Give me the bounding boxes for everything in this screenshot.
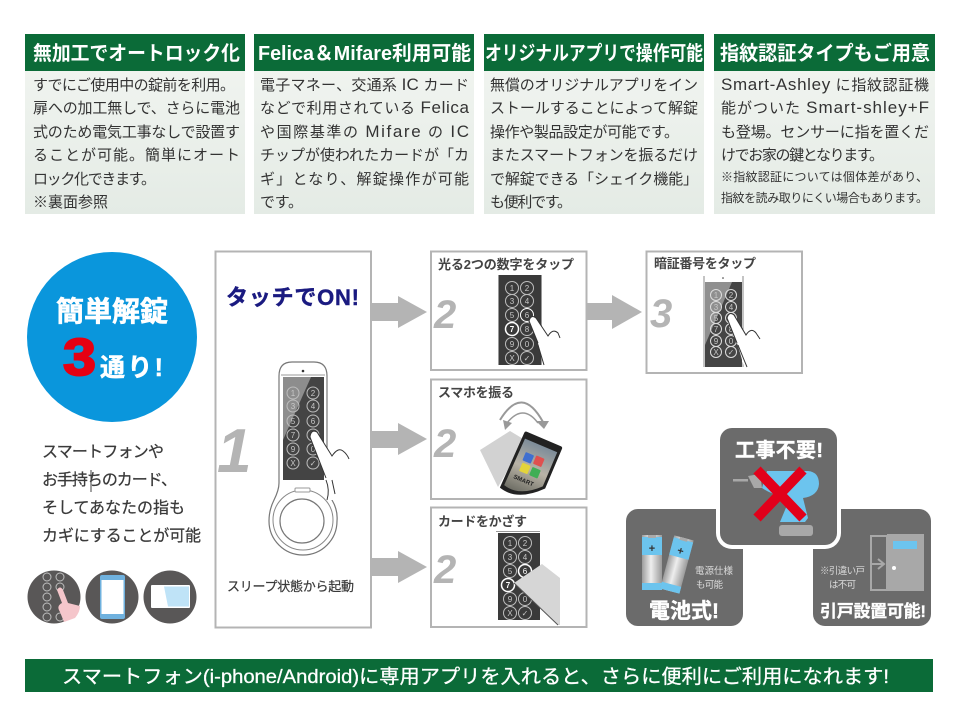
text: original app: またスマートフォンを振るだけ bbox=[490, 147, 698, 164]
step number 2: 2 bbox=[433, 422, 456, 466]
illustration: keypad with finger: 6 bbox=[525, 311, 530, 320]
illustration: lock with keypad: 3 bbox=[291, 402, 296, 411]
illustration: keypad and card: 5 bbox=[508, 567, 513, 576]
heading: tap lit numbers: 光る2つの数字をタップ bbox=[438, 257, 574, 272]
illustration: lock with keypad: 2 bbox=[311, 389, 316, 398]
text: original app: も便利です。 bbox=[490, 194, 572, 211]
note: mains power option bbox=[695, 565, 733, 591]
text: no-modification auto lock: ることが可能。簡単にオート bbox=[33, 146, 240, 164]
illustration: lock with keypad: 6 bbox=[311, 417, 316, 426]
text: Felica and Mifare bbox=[260, 75, 470, 211]
text: original app: ストールすることによって解錠 bbox=[490, 100, 698, 117]
illustration: keypad with finger: X bbox=[713, 348, 719, 357]
illustration: keypad with finger: X bbox=[509, 354, 515, 363]
text: fingerprint type: 指紋を読み取りにくい場合もあります。 bbox=[721, 190, 928, 205]
icon: batteries bbox=[642, 535, 694, 594]
text: Felica and Mifare: 電子マネー、交通系 IC カード bbox=[260, 75, 469, 94]
illustration: keypad and card: 3 bbox=[508, 553, 513, 562]
heading: no-modification auto lock: 無加工でオートロック化 bbox=[33, 42, 240, 65]
icon: card bbox=[144, 570, 196, 624]
panel: step 2 shake the smartphone bbox=[431, 380, 586, 505]
illustration: keypad and card bbox=[496, 532, 560, 625]
icon: batteries: + bbox=[649, 543, 655, 555]
text: Felica and Mifare: チップが使われたカードが「カ bbox=[260, 147, 469, 164]
illustration: keypad with finger: 3 bbox=[510, 297, 515, 306]
illustration: keypad and card: 9 bbox=[508, 595, 513, 604]
heading: original app: オリジナルアプリで操作可能 bbox=[485, 42, 703, 65]
illustration: keypad with finger: 9 bbox=[510, 340, 515, 349]
heading: touch on: タッチでON! bbox=[226, 285, 359, 310]
panel: fingerprint type bbox=[714, 34, 935, 214]
text: Felica and Mifare: や国際基準の Mifare の IC bbox=[260, 122, 469, 141]
icon: batteries: + bbox=[676, 545, 685, 558]
text: fingerprint type bbox=[721, 75, 929, 205]
text: no-modification auto lock: 扉への加工無しで、さらに電池 bbox=[33, 100, 240, 117]
icon: drill crossed out bbox=[733, 470, 819, 536]
illustration: keypad with finger: 5 bbox=[714, 314, 719, 323]
text: fingerprint type: 能がついた Smart-shley+F bbox=[721, 98, 929, 117]
illustration: keypad and card: 1 bbox=[508, 539, 513, 548]
text: no-modification auto lock: 式のため電気工事なしで設置す bbox=[33, 124, 240, 141]
badge: three ways to unlock: 簡単解錠 bbox=[56, 296, 168, 327]
panel: step 2 tap two lit numbers bbox=[431, 252, 586, 370]
illustration: lock with keypad: 5 bbox=[291, 417, 296, 426]
illustration: keypad with finger: 4 bbox=[729, 303, 734, 312]
step number 2: 2 bbox=[433, 548, 456, 592]
illustration: keypad with finger: 8 bbox=[525, 325, 530, 334]
illustration: keypad with finger: 1 bbox=[714, 291, 719, 300]
icon: door bbox=[871, 534, 924, 591]
illustration: keypad with finger: 7 bbox=[510, 325, 515, 334]
text: smartphone, card and finger can be the key: スマートフォンや bbox=[42, 443, 164, 461]
illustration: lock with keypad: 9 bbox=[291, 445, 296, 454]
illustration: keypad and card: ✓ bbox=[522, 609, 528, 618]
illustration: keypad and card: 4 bbox=[523, 553, 528, 562]
card: no construction needed bbox=[716, 424, 841, 549]
step number 3: 3 bbox=[650, 292, 672, 336]
text: fingerprint type: けでお家の鍵となります。 bbox=[721, 147, 884, 164]
text: smartphone, card and finger can be the key bbox=[42, 443, 201, 545]
illustration: lock with keypad: 4 bbox=[311, 402, 316, 411]
text: fingerprint type: Smart-Ashley に指紋認証機 bbox=[721, 75, 929, 94]
arrow: step 1 to tap bbox=[371, 296, 427, 328]
icon: smartphone bbox=[86, 570, 138, 624]
badge: three ways to unlock: 通り! bbox=[100, 354, 163, 382]
illustration: keypad with finger: 0 bbox=[525, 340, 530, 349]
illustration: keypad and card: 6 bbox=[523, 567, 528, 576]
illustration: keypad with finger: 4 bbox=[525, 297, 530, 306]
heading: fingerprint type: 指紋認証タイプもご用意 bbox=[720, 41, 930, 65]
label: battery powered: 電池式! bbox=[649, 600, 719, 623]
illustration: lock with keypad: 0 bbox=[311, 445, 316, 454]
heading: Felica and Mifare: Felica＆Mifare利用可能 bbox=[258, 42, 471, 65]
text: original app: で解錠できる「シェイク機能」 bbox=[490, 171, 698, 188]
illustration: keypad with finger: 0 bbox=[729, 337, 734, 346]
text: no-modification auto lock: ※裏面参照 bbox=[33, 194, 108, 211]
illustration: lock with keypad bbox=[269, 362, 350, 555]
illustration: lock with keypad: 7 bbox=[291, 431, 296, 440]
text: smartphone, card and finger can be the key: そしてあなたの指も bbox=[42, 499, 185, 517]
badge: three ways to unlock: 3 bbox=[63, 329, 96, 387]
illustration: lock with keypad: 8 bbox=[311, 431, 316, 440]
illustration: lock with keypad: X bbox=[290, 459, 296, 468]
banner: app message bbox=[25, 659, 933, 692]
panel: original app bbox=[484, 34, 704, 214]
illustration: keypad with finger: 2 bbox=[525, 284, 530, 293]
illustration: keypad with finger bbox=[704, 276, 761, 367]
card: sliding door bbox=[813, 509, 931, 626]
text: original app: 無償のオリジナルアプリをイン bbox=[490, 77, 698, 94]
text: original app: 操作や製品設定が可能です。 bbox=[490, 124, 679, 141]
text: no-modification auto lock: ロック化できます。 bbox=[33, 171, 156, 188]
badge: three ways to unlock bbox=[27, 252, 197, 422]
illustration: keypad with finger bbox=[498, 275, 560, 365]
heading: hold card: カードをかざす bbox=[438, 514, 527, 529]
illustration: keypad and card: 2 bbox=[523, 539, 528, 548]
text: Felica and Mifare: ギ」となり、解錠操作が可能 bbox=[260, 171, 469, 188]
illustration: keypad with finger: ✓ bbox=[728, 348, 734, 357]
illustration: keypad with finger: 9 bbox=[714, 337, 719, 346]
illustration: keypad and card: 7 bbox=[506, 581, 511, 590]
note: not for double sliding: は不可 bbox=[829, 580, 856, 591]
note: mains power option: も可能 bbox=[696, 579, 723, 591]
text: Felica and Mifare: です。 bbox=[260, 194, 303, 211]
illustration: keypad with finger: 8 bbox=[729, 325, 734, 334]
text: fingerprint type: も登場。センサーに指を置くだ bbox=[721, 124, 929, 141]
panel: Felica and Mifare bbox=[254, 34, 474, 214]
step number 1: 1 bbox=[217, 417, 251, 486]
heading: shake smartphone: スマホを振る bbox=[438, 385, 514, 400]
illustration: keypad with finger: 3 bbox=[714, 303, 719, 312]
icon: keypad with finger bbox=[28, 570, 80, 624]
icon: shake arcs bbox=[500, 402, 549, 430]
illustration: keypad with finger: 2 bbox=[729, 291, 734, 300]
note: mains power option: 電源仕様 bbox=[695, 565, 733, 577]
text: no-modification auto lock bbox=[33, 77, 240, 211]
illustration: lock with keypad: ✓ bbox=[310, 459, 316, 468]
panel: step 3 tap passcode bbox=[646, 252, 802, 373]
illustration: keypad with finger: ✓ bbox=[524, 354, 530, 363]
panel: no-modification auto lock bbox=[25, 34, 245, 214]
panel: step 2 hold card bbox=[431, 508, 586, 627]
text: no-modification auto lock: すでにご使用中の錠前を利用。 bbox=[33, 77, 235, 94]
illustration: keypad and card: X bbox=[507, 609, 513, 618]
illustration: smartphone bbox=[499, 431, 563, 505]
arrow: step 1 to card bbox=[371, 551, 427, 583]
illustration: lock with keypad: 1 bbox=[291, 389, 296, 398]
text: smartphone, card and finger can be the key: お手持ちのカード、 bbox=[42, 471, 177, 489]
label: no construction: 工事不要! bbox=[735, 439, 823, 462]
caption: wake from sleep: スリープ状態から起動 bbox=[227, 579, 354, 594]
illustration: keypad with finger: 6 bbox=[729, 314, 734, 323]
illustration: smartphone: SMART bbox=[512, 474, 534, 488]
illustration: keypad with finger: 7 bbox=[714, 325, 719, 334]
text: smartphone, card and finger can be the key: カギにすることが可能 bbox=[42, 527, 201, 545]
text: Felica and Mifare: などで利用されている Felica bbox=[260, 98, 470, 117]
arrow: step 1 to shake bbox=[371, 423, 427, 455]
label: sliding door: 引戸設置可能! bbox=[820, 601, 926, 621]
note: not for double sliding bbox=[820, 565, 865, 591]
illustration: keypad with finger: 1 bbox=[510, 284, 515, 293]
arrow: step 2 to step 3 bbox=[586, 295, 642, 329]
text: original app bbox=[490, 77, 698, 211]
panel: step 1 touch on bbox=[216, 252, 371, 628]
step number 2: 2 bbox=[433, 293, 456, 337]
card: battery powered bbox=[626, 509, 743, 626]
heading: tap passcode: 暗証番号をタップ bbox=[654, 256, 756, 271]
banner: app message: スマートフォン(i-phone/Android)に専用アプリを入れると、さらに便利にご利用になれます! bbox=[62, 666, 889, 688]
illustration: keypad with finger: 5 bbox=[510, 311, 515, 320]
note: not for double sliding: ※引違い戸 bbox=[820, 565, 865, 577]
illustration: card behind bbox=[480, 431, 525, 487]
illustration: keypad and card: 0 bbox=[523, 595, 528, 604]
text: fingerprint type: ※指紋認証については個体差があり、 bbox=[721, 169, 928, 184]
